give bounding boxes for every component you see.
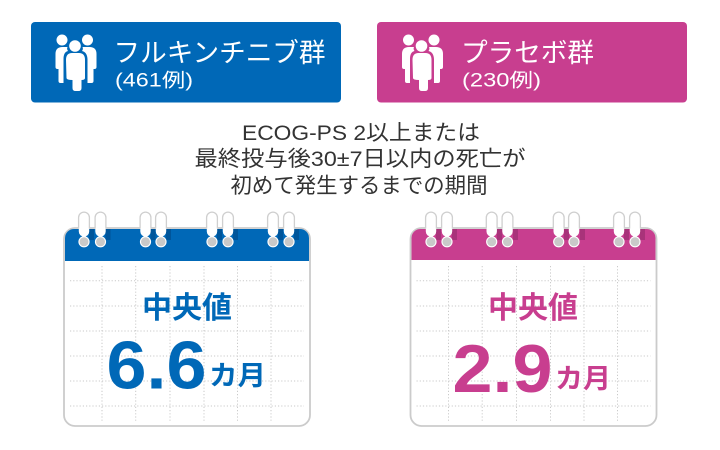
patient count: (461例) (115, 70, 193, 92)
endpoint description: 初めて発生するまでの期間 (230, 174, 488, 198)
group name: プラセボ群 (461, 38, 594, 68)
calendar: プラセボ群 median (410, 212, 656, 426)
endpoint description (194, 121, 526, 198)
panel: プラセボ群 header (377, 22, 687, 102)
endpoint description: ECOG-PS 2以上または (242, 121, 480, 145)
unit: months: カ月 (209, 361, 266, 391)
calendar: フルキンチニブ群 median (64, 212, 310, 426)
icon: group of people (402, 34, 443, 91)
group name: フルキンチニブ群 (114, 38, 326, 68)
panel: フルキンチニブ群 header (31, 22, 341, 102)
patient count: (230例) (462, 70, 541, 92)
endpoint description: 最終投与後30±7日以内の死亡が (194, 147, 526, 171)
unit: months: カ月 (555, 364, 611, 394)
label: median: 中央値 (142, 292, 232, 325)
label: median: 中央値 (488, 292, 578, 325)
icon: group of people (56, 34, 96, 91)
value: 2.9 months: 2.9 (452, 331, 552, 407)
value: 6.6 months: 6.6 (106, 328, 206, 404)
